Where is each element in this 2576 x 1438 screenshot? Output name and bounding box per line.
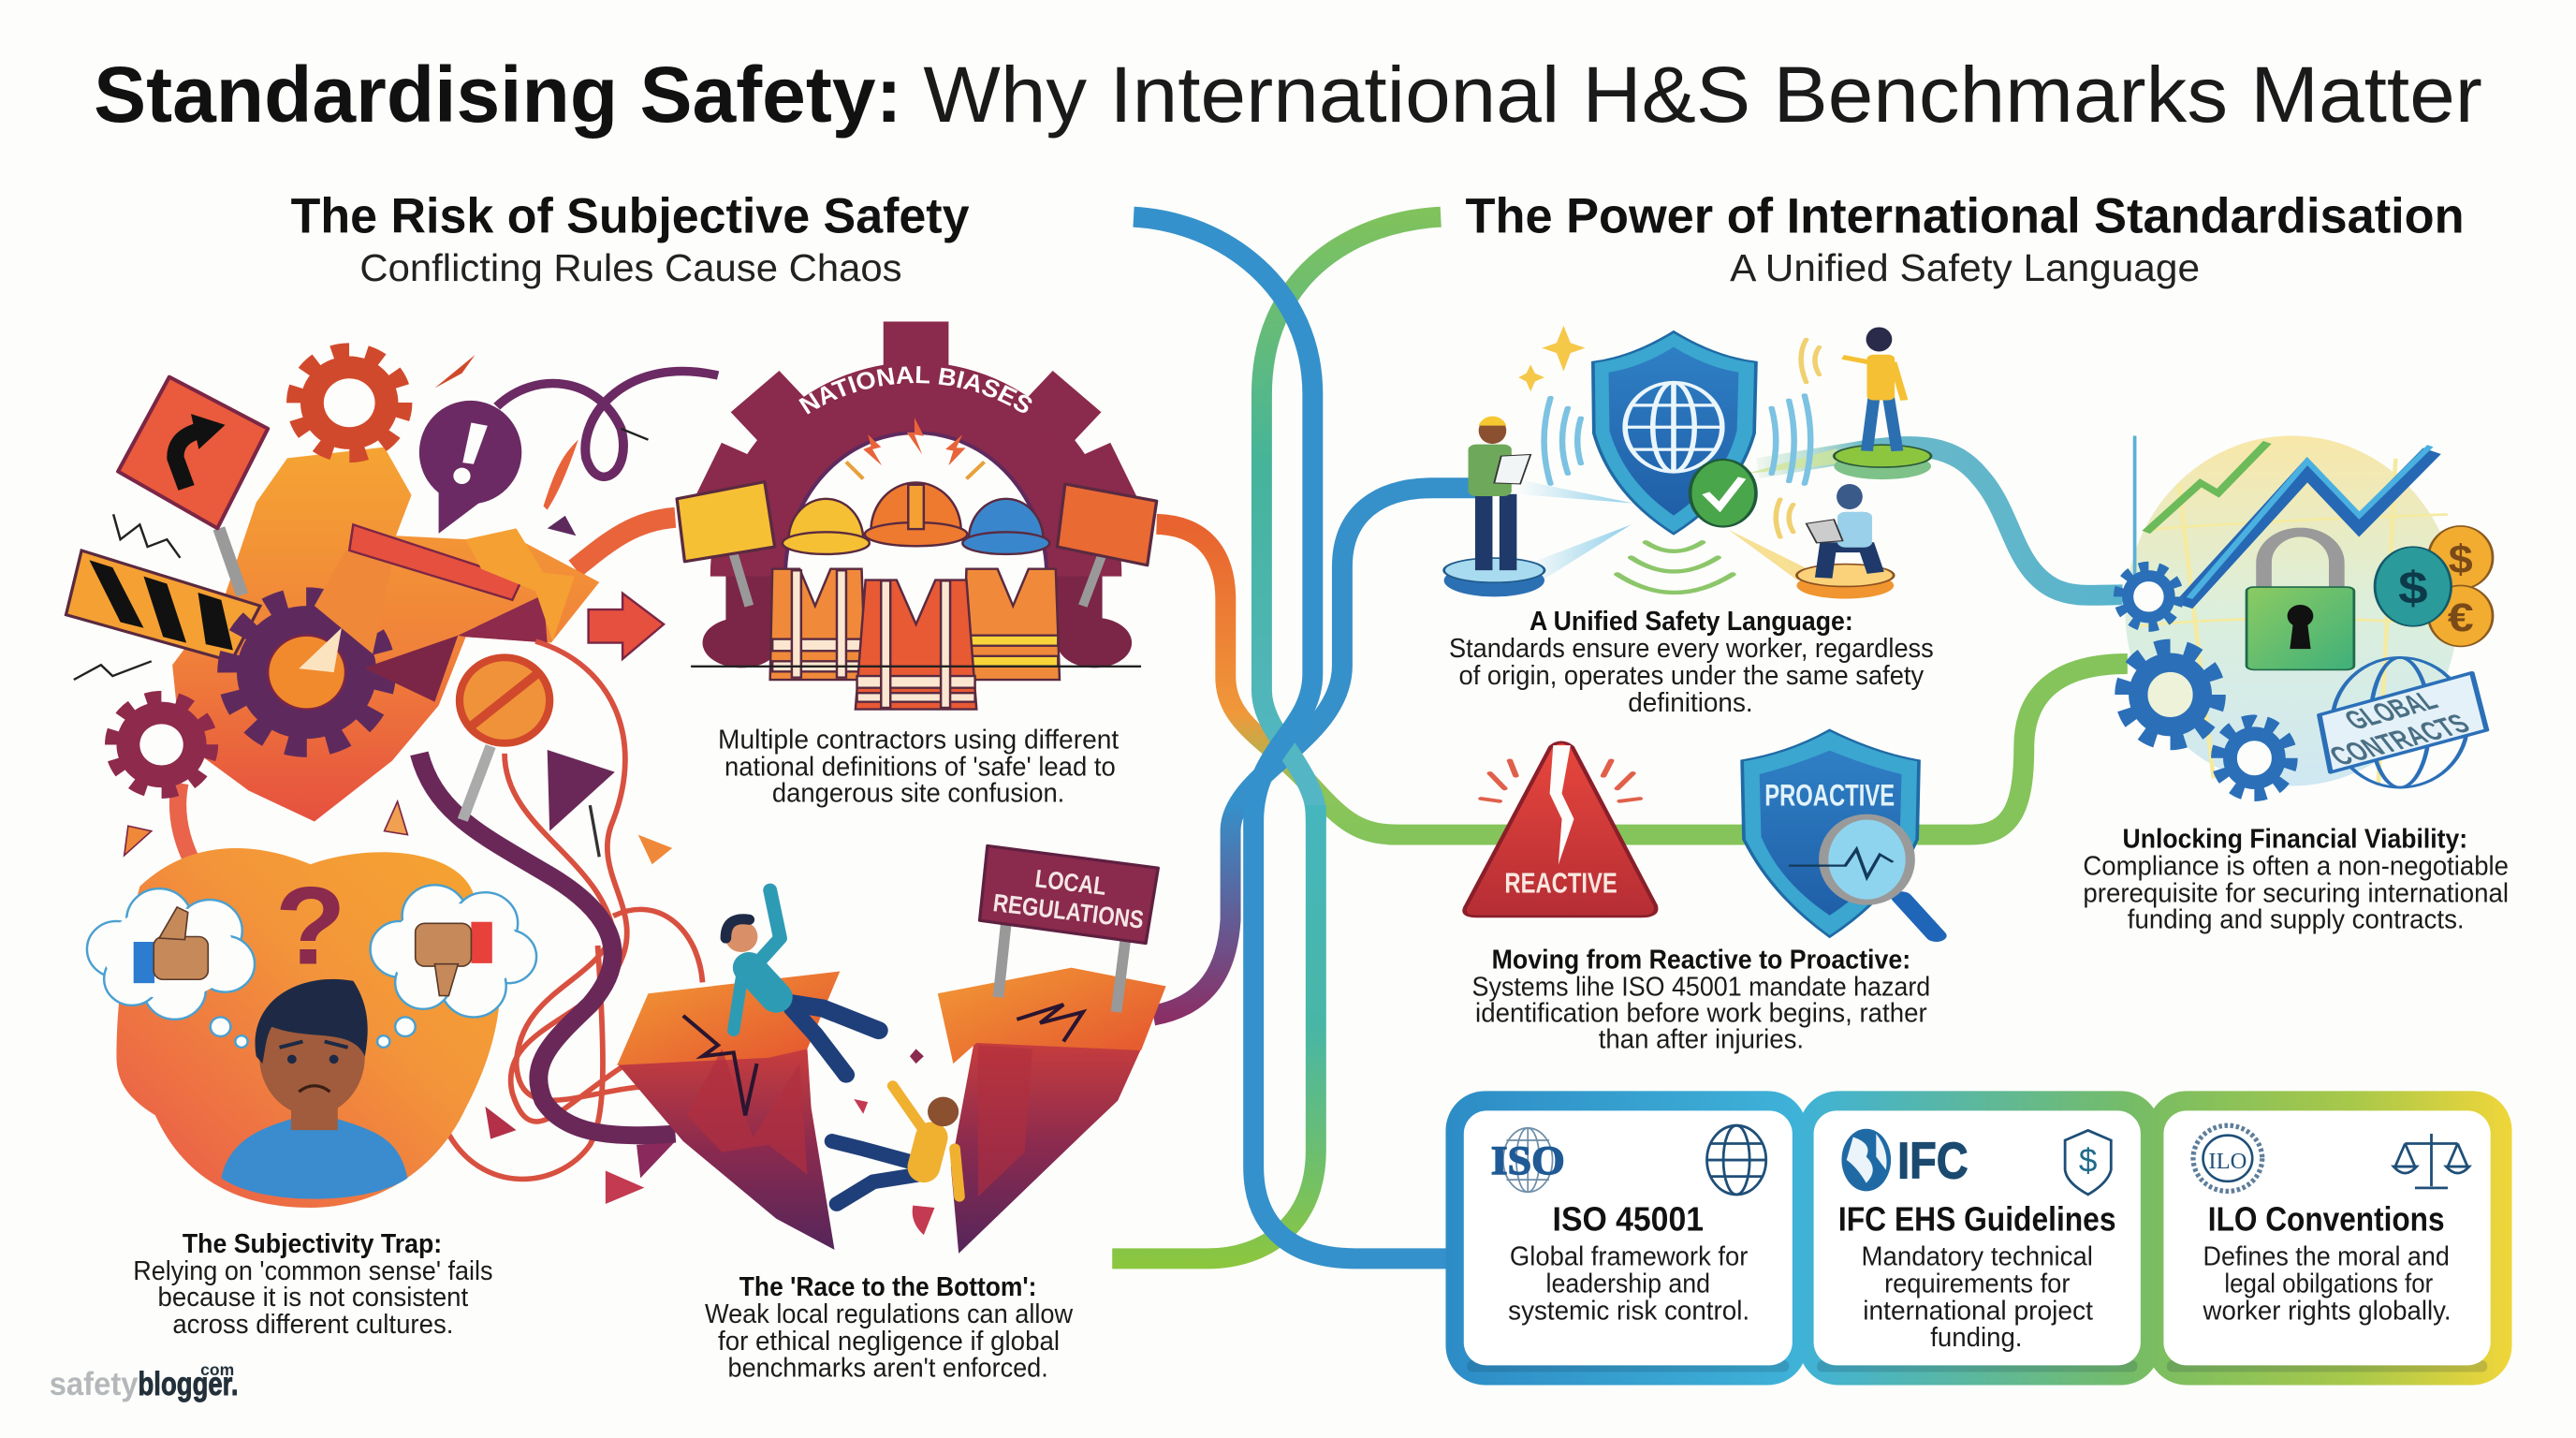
icon: global contracts stamp xyxy=(2320,657,2487,787)
icon: padlock xyxy=(2247,532,2354,669)
figure: standing woman xyxy=(1834,327,1931,479)
card body: leadership and xyxy=(1546,1269,1710,1299)
left cliff xyxy=(617,972,840,1250)
text: unified safety language xyxy=(1449,607,1934,718)
text: reactive to proactive: identification before work begins, rather xyxy=(1475,999,1927,1029)
text: unified safety language: Standards ensure every worker, regardless xyxy=(1449,634,1934,664)
icon: no-entry sign xyxy=(460,657,549,820)
text: national biases caption: dangerous site confusion. xyxy=(772,778,1064,808)
panel: national biases illustration xyxy=(676,322,1159,711)
tangled loop line xyxy=(497,372,718,477)
text: subjectivity trap xyxy=(133,1229,493,1340)
icon: striped barrier xyxy=(66,550,260,661)
icon: broken beam xyxy=(315,524,575,702)
card body: international project xyxy=(1863,1296,2093,1326)
card body: legal obilgations for xyxy=(2224,1269,2433,1299)
icon: small gear xyxy=(112,698,211,791)
green trend line xyxy=(2146,443,2267,532)
falling person two xyxy=(832,1086,959,1204)
icon: reactive warning triangle xyxy=(1465,742,1656,917)
text: financial viability xyxy=(2083,825,2509,935)
left illustrations group: distorted zoom coordinates xyxy=(64,322,1166,1254)
card body: requirements for xyxy=(1884,1269,2070,1299)
chaos blob: gears and road signs xyxy=(66,351,934,1235)
text: race to the bottom xyxy=(705,1272,1074,1384)
title: Why International H&S Benchmarks Matter xyxy=(923,51,2482,139)
card: IFC EHS Guidelines xyxy=(1814,1110,2141,1365)
text: race to the bottom: Weak local regulations can allow xyxy=(705,1299,1074,1329)
card body xyxy=(1862,1241,2093,1353)
icon: ILO emblem xyxy=(2193,1125,2262,1191)
text: race to the bottom: for ethical negligence if global xyxy=(718,1327,1060,1357)
figure: worker with clipboard xyxy=(1444,417,1544,596)
card title: ISO 45001 xyxy=(1553,1200,1704,1239)
icon: local regulations sign xyxy=(980,845,1158,1012)
label: national biases curved text xyxy=(784,383,1048,433)
icon: red arrow xyxy=(589,594,664,659)
heading: right column: The Power of International Standardisation xyxy=(1466,188,2465,243)
card body: systemic risk control. xyxy=(1508,1296,1749,1326)
icon: coins: € xyxy=(2448,595,2474,639)
text: unified safety language: definitions. xyxy=(1628,688,1753,718)
gear arch xyxy=(695,321,1136,577)
icon: reactive warning triangle: REACTIVE xyxy=(1504,868,1617,900)
icon: ISO logo xyxy=(1491,1128,1565,1192)
panel: standards card strip xyxy=(1445,1091,2511,1385)
icon: ILO emblem: ILO xyxy=(2208,1149,2247,1174)
icon: big central gear xyxy=(229,598,385,746)
panel: national biases illustration: NATIONAL BIASES xyxy=(798,366,1032,414)
icon: globe xyxy=(1707,1125,1766,1195)
icon: local regulations sign: REGULATIONS xyxy=(991,888,1146,934)
icon: proactive shield with magnifier xyxy=(1742,730,1937,937)
text: reactive to proactive: than after injuries. xyxy=(1599,1025,1804,1055)
text: reactive to proactive xyxy=(1472,946,1930,1055)
falling person one xyxy=(725,890,879,1075)
text: race to the bottom: The 'Race to the Bottom': xyxy=(739,1272,1036,1302)
icon: coins xyxy=(2375,526,2493,646)
icon: global contracts stamp: GLOBAL xyxy=(2338,685,2444,736)
card body: funding. xyxy=(1930,1323,2022,1353)
logo: safetyblogger: com xyxy=(200,1360,234,1379)
text: subjectivity trap: because it is not consistent xyxy=(158,1283,468,1313)
panel: race to the bottom illustration xyxy=(617,845,1166,1254)
heading: right column: A Unified Safety Language xyxy=(1730,246,2200,289)
logo: safetyblogger xyxy=(50,1360,239,1402)
icon: question mark: ? xyxy=(275,863,346,988)
icon: top gear xyxy=(295,351,403,454)
figure: seated worker with laptop xyxy=(1796,484,1894,598)
text: financial viability: funding and supply contracts. xyxy=(2128,905,2465,935)
title: Standardising Safety: xyxy=(94,51,902,139)
zig-zag scribbles and debris xyxy=(74,429,648,680)
card body: Defines the moral and xyxy=(2203,1241,2450,1271)
text: national biases caption: Multiple contractors using different xyxy=(718,725,1119,755)
card body xyxy=(1508,1241,1749,1326)
map globe background xyxy=(2125,435,2458,786)
text: national biases caption: national definitions of 'safe' lead to xyxy=(724,752,1116,782)
panel: financial viability illustration xyxy=(2119,435,2493,795)
white arch interior xyxy=(787,434,1045,667)
card body: Mandatory technical xyxy=(1862,1241,2093,1271)
text: race to the bottom: benchmarks aren't enforced. xyxy=(728,1354,1048,1384)
card title: ILO Conventions xyxy=(2208,1200,2445,1239)
lightning bolts xyxy=(863,418,966,465)
heading: left column: The Risk of Subjective Safety xyxy=(291,188,970,243)
signs xyxy=(677,482,1157,606)
card body: Global framework for xyxy=(1510,1241,1748,1271)
text: subjectivity trap: The Subjectivity Trap: xyxy=(183,1229,442,1259)
icon: thumbs down cloud xyxy=(371,885,536,1017)
card: ISO 45001 xyxy=(1464,1110,1793,1365)
icon: globe shield with check xyxy=(1593,331,1756,534)
card title: IFC EHS Guidelines xyxy=(1838,1200,2116,1239)
right illustrations group: distorted zoom coordinates xyxy=(1444,326,2493,937)
icon: coins: $ xyxy=(2449,536,2473,581)
icon: IFC logo: IFC xyxy=(1897,1132,1969,1189)
red curve from gears to person xyxy=(178,783,203,879)
text: financial viability: prerequisite for securing international xyxy=(2083,879,2509,909)
logo: safetyblogger: safety xyxy=(50,1366,139,1402)
heading: left column: Conflicting Rules Cause Chaos xyxy=(359,246,902,289)
icon: scales xyxy=(2393,1134,2469,1188)
tangled red cables xyxy=(446,641,703,1179)
icon: gears xyxy=(2119,567,2291,795)
icon: alert speech bubble xyxy=(419,401,521,534)
icon: thumbs up cloud xyxy=(87,888,255,1020)
icon: IFC logo xyxy=(1841,1129,1969,1191)
icon: turn sign xyxy=(118,377,268,594)
icon: purple flag xyxy=(548,750,615,857)
blue zigzag chart line xyxy=(2183,451,2432,606)
title xyxy=(94,51,2482,139)
icon: sparkles xyxy=(1518,326,1586,391)
right cliff xyxy=(938,968,1166,1254)
person with worried face xyxy=(221,979,407,1199)
icon: ISO logo: ISO xyxy=(1491,1138,1565,1183)
card body: worker rights globally. xyxy=(2203,1296,2452,1326)
icon: coins: $ xyxy=(2398,563,2428,614)
icon: dollar shield: $ xyxy=(2079,1142,2097,1179)
panel: reactive to proactive illustration xyxy=(1465,730,1937,937)
maroon base mounds xyxy=(703,465,1132,668)
heading: left column xyxy=(291,188,970,289)
text: reactive to proactive: Moving from Reactive to Proactive: xyxy=(1492,946,1910,976)
text: subjectivity trap: Relying on 'common sense' fails xyxy=(133,1256,493,1286)
panel: unified safety language illustration xyxy=(1444,326,1931,598)
signal beams xyxy=(1515,448,1841,580)
text: financial viability: Compliance is often a non-negotiable xyxy=(2083,852,2509,882)
card: ILO Conventions xyxy=(2163,1110,2491,1365)
text: national biases caption xyxy=(718,725,1119,808)
logo: safetyblogger: blogger. xyxy=(138,1366,239,1402)
panel: subjectivity head illustration xyxy=(87,848,536,1208)
icon: proactive shield with magnifier: PROACTIVE xyxy=(1764,778,1895,813)
flowing river connectors xyxy=(575,217,2128,1258)
text: unified safety language: of origin, operates under the same safety xyxy=(1459,661,1925,691)
card body xyxy=(2203,1241,2452,1326)
hard hats and vests xyxy=(770,482,1060,710)
heading: right column xyxy=(1466,188,2465,289)
dark purple cable xyxy=(419,754,676,1136)
text: financial viability: Unlocking Financial Viability: xyxy=(2123,825,2467,855)
decorative confetti shapes xyxy=(124,355,934,1235)
text: subjectivity trap: across different cultures. xyxy=(172,1310,453,1340)
icon: dollar shield xyxy=(2065,1130,2111,1195)
text: unified safety language: A Unified Safety Language: xyxy=(1530,607,1853,637)
text: reactive to proactive: Systems lihe ISO 45001 mandate hazard xyxy=(1472,973,1930,1003)
signal waves xyxy=(1544,339,1820,593)
thought bubbles xyxy=(211,1017,416,1048)
icon: local regulations sign: LOCAL xyxy=(1033,864,1108,901)
